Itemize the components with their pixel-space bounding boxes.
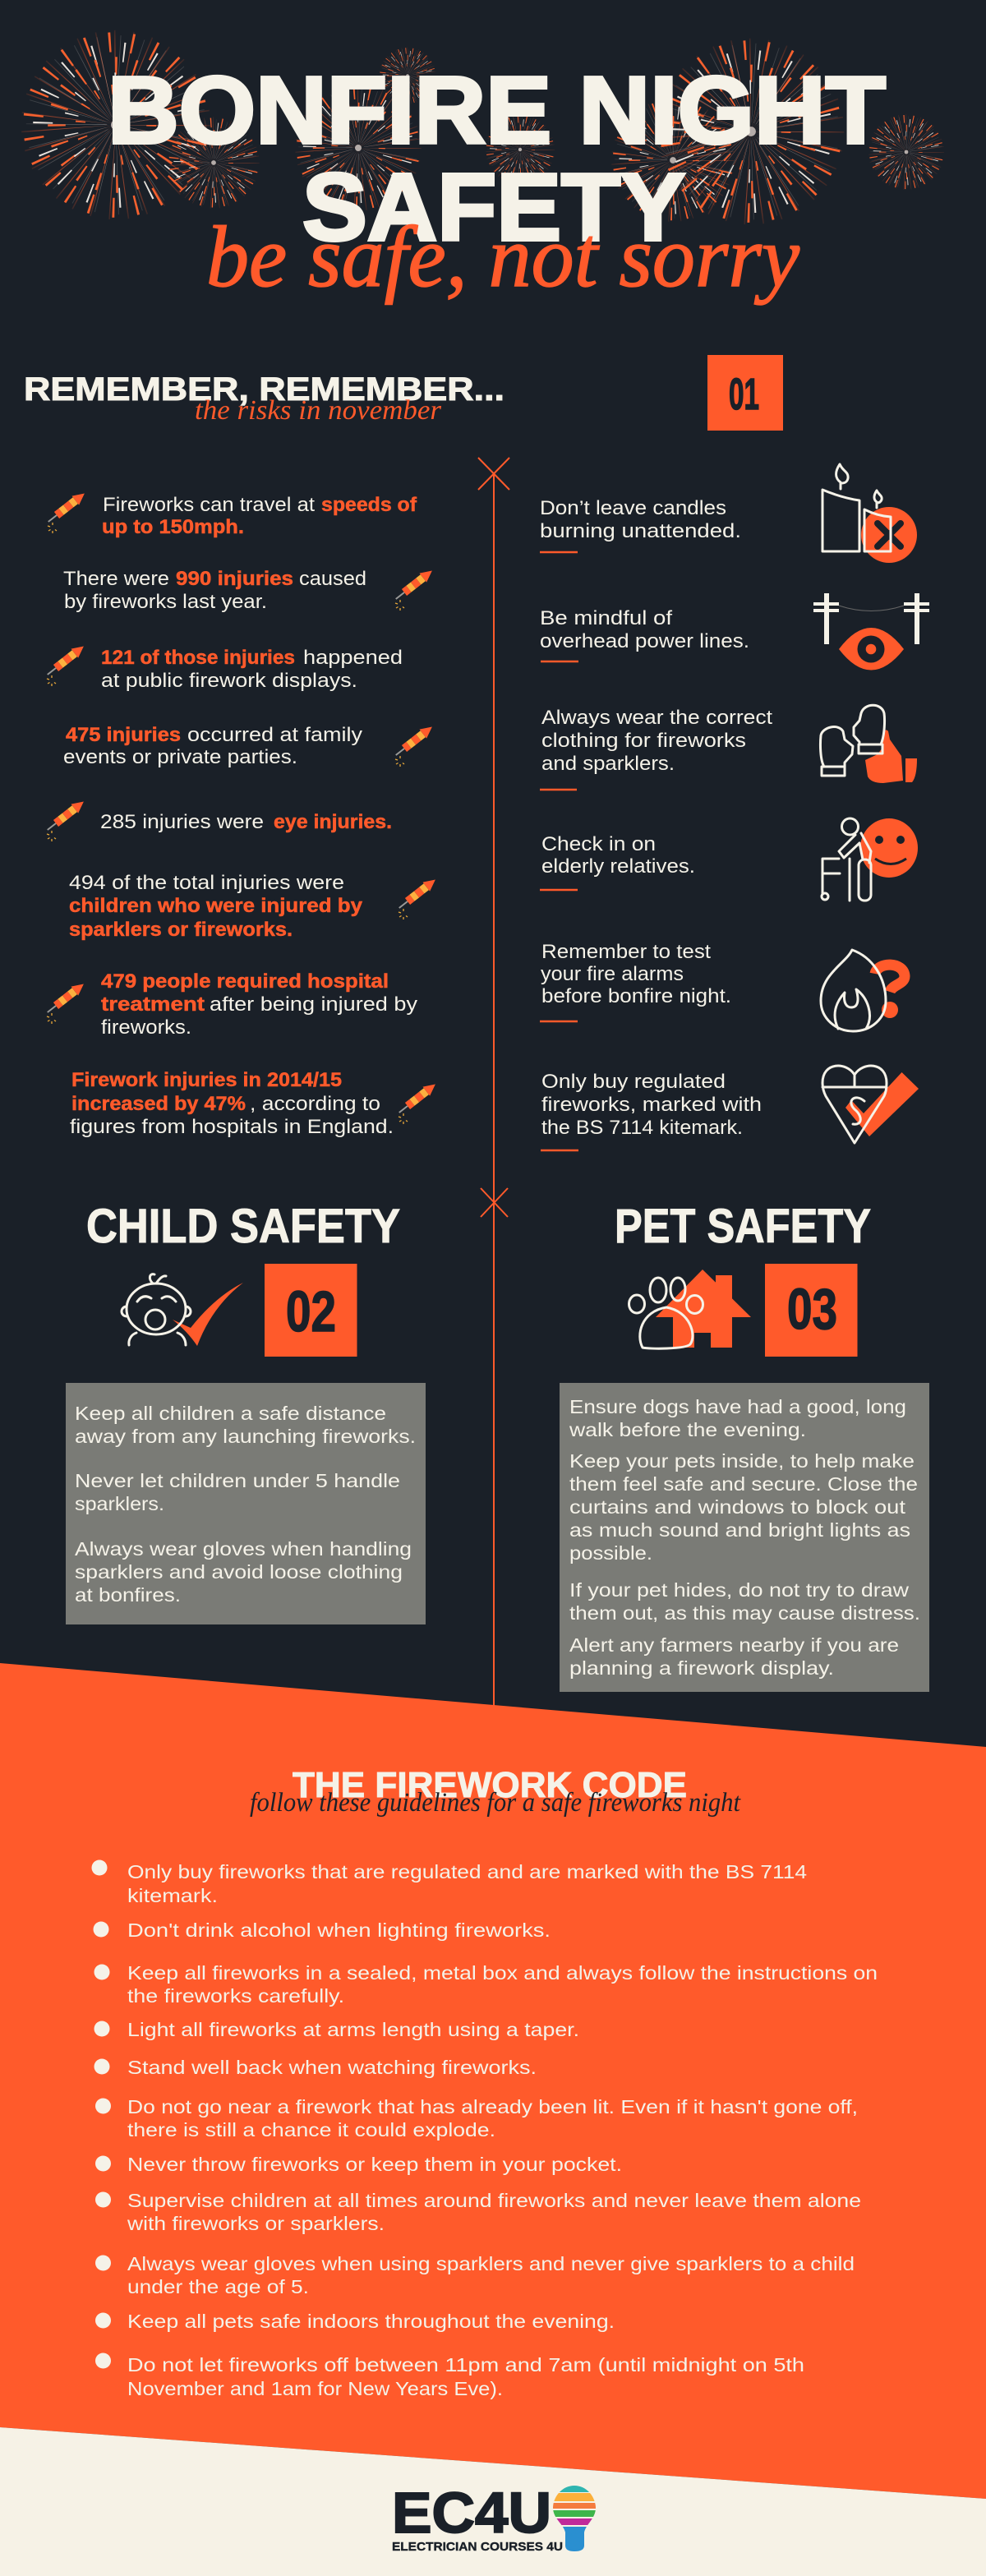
stat 2: 990 injuries bbox=[176, 568, 293, 590]
stat 7: 479 people required hospital bbox=[101, 970, 389, 993]
panel: child safety tips bbox=[66, 1383, 426, 1624]
stat 4: events or private parties. bbox=[63, 746, 297, 768]
panel: firework code background bbox=[0, 1663, 986, 2499]
reminder: power lines text: overhead power lines. bbox=[540, 630, 749, 652]
reminder: clothing text: Always wear the correct bbox=[541, 707, 772, 729]
reminder: elderly text: elderly relatives. bbox=[541, 855, 695, 878]
rule 3: the fireworks carefully. bbox=[127, 1985, 344, 2007]
reminder: clothing text bbox=[540, 707, 772, 790]
rule 6: there is still a chance it could explode. bbox=[127, 2119, 495, 2141]
rule 1 bbox=[92, 1860, 807, 1906]
panel: pet safety tips: possible. bbox=[569, 1542, 652, 1564]
icon: flame and question mark bbox=[821, 950, 905, 1031]
panel: child safety tips: Never let children under 5 handle bbox=[75, 1470, 400, 1491]
reminder: kitemark text: the BS 7114 kitemark. bbox=[541, 1117, 743, 1139]
stat 3: at public firework displays. bbox=[101, 670, 357, 692]
reminder: fire alarms text: before bonfire night. bbox=[541, 985, 731, 1007]
number badge 02: 02 bbox=[286, 1279, 336, 1343]
reminder: candles text bbox=[540, 497, 741, 552]
stat 2 bbox=[63, 566, 435, 613]
reminder: kitemark text bbox=[541, 1071, 762, 1150]
stat 8: , according to bbox=[250, 1093, 380, 1115]
firework code list bbox=[92, 1860, 878, 2399]
reminder: power lines text: Be mindful of bbox=[540, 607, 672, 629]
panel: pet safety tips: Alert any farmers nearby if you are bbox=[569, 1634, 899, 1656]
panel: pet safety tips: them feel safe and secure. Close the bbox=[569, 1473, 918, 1495]
panel: pet safety tips: If your pet hides, do not try to draw bbox=[569, 1579, 909, 1601]
panel: pet safety tips: walk before the evening. bbox=[569, 1419, 806, 1440]
reminder: clothing text: clothing for fireworks bbox=[541, 730, 746, 752]
panel: firework statistics bbox=[44, 489, 439, 1138]
panel: pet safety tips: as much sound and bright lights as bbox=[569, 1519, 910, 1541]
reminder: candles text: Don’t leave candles bbox=[540, 497, 726, 519]
rule 1: kitemark. bbox=[127, 1885, 218, 1906]
rule 6: Do not go near a firework that has already been lit. Even if it hasn't gone off, bbox=[127, 2096, 858, 2117]
heading: remember remember: REMEMBER, REMEMBER... bbox=[24, 371, 505, 408]
rule 6 bbox=[95, 2096, 858, 2141]
icon: kitemark and tick bbox=[822, 1066, 919, 1143]
heading: the firework code: THE FIREWORK CODE bbox=[293, 1765, 687, 1805]
panel: child safety tips: sparklers. bbox=[75, 1493, 164, 1514]
rule 9: under the age of 5. bbox=[127, 2276, 309, 2297]
icon: baby and tick bbox=[122, 1274, 243, 1346]
rule 3 bbox=[94, 1962, 878, 2007]
panel: pet safety tips: them out, as this may cause distress. bbox=[569, 1602, 920, 1624]
footer background bbox=[0, 2427, 986, 2576]
title: BONFIRE NIGHT bbox=[108, 57, 886, 164]
icon: gloves and thumbs up bbox=[820, 705, 917, 783]
stat 7: after being injured by bbox=[210, 993, 417, 1016]
panel: child safety tips: sparklers and avoid loose clothing bbox=[75, 1561, 403, 1583]
rule 8: Supervise children at all times around fireworks and never leave them alone bbox=[127, 2190, 861, 2211]
stat 2: caused bbox=[299, 568, 366, 590]
title bbox=[108, 57, 886, 260]
stat 4 bbox=[63, 722, 435, 768]
stat 1: speeds of bbox=[321, 494, 417, 516]
stat 8: increased by 47% bbox=[71, 1093, 246, 1115]
rule 4: Light all fireworks at arms length using a taper. bbox=[127, 2019, 579, 2040]
rule 1: Only buy fireworks that are regulated and are marked with the BS 7114 bbox=[127, 1861, 807, 1882]
rule 9: Always wear gloves when using sparklers and never give sparklers to a child bbox=[127, 2253, 855, 2274]
subheading: the risks in november: the risks in november bbox=[195, 395, 442, 426]
logo: EC4U bbox=[393, 2486, 596, 2551]
stat 7 bbox=[44, 970, 417, 1039]
reminder: kitemark text: Only buy regulated bbox=[541, 1071, 726, 1093]
panel: child safety tips: at bonfires. bbox=[75, 1584, 181, 1606]
heading: child safety: CHILD SAFETY bbox=[86, 1200, 400, 1253]
stat 3: 121 of those injuries bbox=[101, 647, 295, 669]
panel: child safety tips: away from any launching fireworks. bbox=[75, 1426, 416, 1447]
panel: pet safety tips bbox=[560, 1383, 929, 1692]
icon: candles with cross bbox=[822, 464, 917, 563]
panel: child safety tips: Always wear gloves when handling bbox=[75, 1538, 412, 1560]
icon: striped light bulb bbox=[553, 2486, 596, 2551]
reminder: elderly text: Check in on bbox=[541, 833, 656, 855]
reminder: fire alarms text bbox=[540, 941, 731, 1021]
fireworks background bbox=[33, 42, 939, 214]
rule 11: November and 1am for New Years Eve). bbox=[127, 2378, 503, 2399]
icon: paw and house bbox=[629, 1270, 751, 1348]
stat 6: sparklers or fireworks. bbox=[69, 919, 293, 941]
stat 8: Firework injuries in 2014/15 bbox=[71, 1069, 342, 1091]
rule 8: with fireworks or sparklers. bbox=[127, 2213, 385, 2234]
stat 7: fireworks. bbox=[101, 1016, 191, 1039]
icon: elderly person and smiley bbox=[822, 818, 918, 901]
rule 8 bbox=[95, 2190, 861, 2234]
stat 3: happened bbox=[303, 647, 403, 669]
centre timeline with cross markers bbox=[478, 458, 509, 1706]
stat 8: figures from hospitals in England. bbox=[70, 1116, 394, 1138]
stat 4: occurred at family bbox=[187, 724, 362, 746]
stat 5: 285 injuries were bbox=[100, 811, 264, 833]
number badge 02 bbox=[265, 1264, 357, 1357]
stat 6: 494 of the total injuries were bbox=[69, 872, 344, 894]
reminder: clothing text: and sparklers. bbox=[541, 753, 675, 775]
title: SAFETY bbox=[302, 154, 685, 260]
heading: pet safety: PET SAFETY bbox=[615, 1200, 871, 1253]
stat 8 bbox=[70, 1069, 439, 1138]
rule 9 bbox=[95, 2253, 855, 2297]
panel: pet safety tips: curtains and windows to block out bbox=[569, 1496, 906, 1518]
reminder: power lines text bbox=[540, 607, 749, 661]
subheading: follow these guidelines: follow these guidelines for a safe fireworks night bbox=[250, 1788, 741, 1818]
stat 1: up to 150mph. bbox=[102, 516, 244, 538]
rule 2: Don't drink alcohol when lighting fireworks. bbox=[127, 1919, 551, 1941]
rule 10: Keep all pets safe indoors throughout the evening. bbox=[127, 2311, 615, 2332]
rule 7: Never throw fireworks or keep them in your pocket. bbox=[127, 2154, 622, 2175]
stat 5: eye injuries. bbox=[274, 811, 392, 833]
rule 11: Do not let fireworks off between 11pm and 7am (until midnight on 5th bbox=[127, 2354, 804, 2376]
reminder: fire alarms text: Remember to test bbox=[541, 941, 711, 963]
reminder: fire alarms text: your fire alarms bbox=[541, 963, 684, 985]
stat 4: 475 injuries bbox=[66, 724, 181, 746]
reminder: candles text: burning unattended. bbox=[540, 520, 741, 542]
rule 3: Keep all fireworks in a sealed, metal box and always follow the instructions on bbox=[127, 1962, 878, 1984]
stat 2: There were bbox=[63, 568, 169, 590]
number badge 01: 01 bbox=[729, 370, 759, 419]
logo: EC4U: EC4U bbox=[392, 2481, 551, 2545]
number badge 03 bbox=[765, 1264, 858, 1357]
stat 1 bbox=[44, 489, 417, 538]
number badge 03: 03 bbox=[787, 1277, 837, 1341]
tagline: be safe, not sorry bbox=[206, 209, 800, 305]
stat 2: by fireworks last year. bbox=[64, 591, 267, 613]
panel: pet safety tips: planning a firework display. bbox=[569, 1657, 834, 1679]
stat 7: treatment bbox=[101, 993, 205, 1016]
reminder: elderly text bbox=[540, 833, 695, 890]
panel: pet safety tips: Keep your pets inside, to help make bbox=[569, 1450, 915, 1472]
stat 6: children who were injured by bbox=[69, 895, 363, 917]
rule 11 bbox=[95, 2353, 804, 2399]
icon: power lines and eye bbox=[813, 593, 929, 670]
logo: EC4U: ELECTRICIAN COURSES 4U bbox=[392, 2540, 563, 2554]
panel: child safety tips: Keep all children a safe distance bbox=[75, 1403, 386, 1424]
rule 5: Stand well back when watching fireworks. bbox=[127, 2057, 537, 2078]
panel: safety reminders bbox=[540, 464, 929, 1150]
stat 1: Fireworks can travel at bbox=[103, 494, 315, 516]
panel: pet safety tips: Ensure dogs have had a good, long bbox=[569, 1396, 906, 1417]
number badge 01 bbox=[707, 355, 783, 431]
stat 6 bbox=[69, 872, 439, 941]
stat 5 bbox=[44, 797, 392, 841]
reminder: kitemark text: fireworks, marked with bbox=[541, 1094, 762, 1116]
stat 3 bbox=[44, 642, 403, 692]
